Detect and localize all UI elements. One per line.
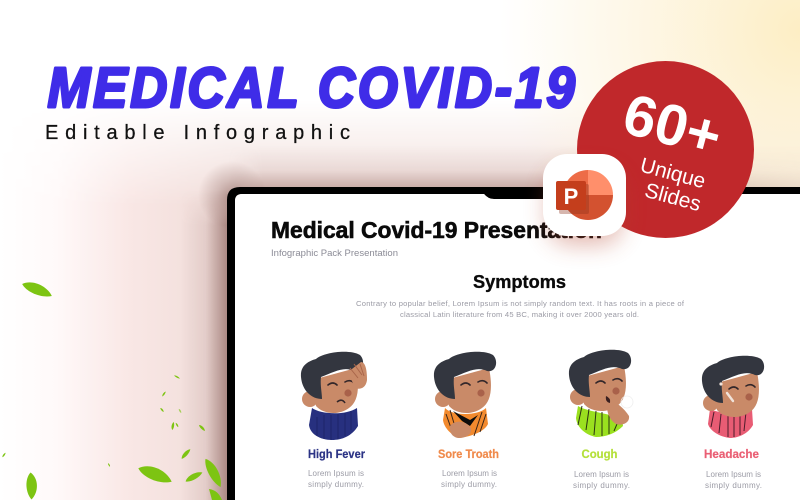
illustration: high fever <box>301 352 367 440</box>
leaf <box>136 462 174 487</box>
caption: cough: Lorem Ipsum is <box>574 470 629 479</box>
illustration: headache <box>702 356 764 438</box>
badge number: 60+ <box>616 81 728 170</box>
leaf <box>202 456 225 489</box>
caption: sore throat <box>441 469 497 489</box>
section description <box>356 299 685 319</box>
caption: high fever: Lorem Ipsum is <box>308 469 364 478</box>
icon letter: P <box>564 184 578 209</box>
leaf <box>174 375 180 379</box>
badge caption: Slides <box>642 179 703 216</box>
laptop frame <box>227 187 800 500</box>
leaf <box>209 489 222 500</box>
caption: cough: simply dummy. <box>573 481 630 490</box>
symptom: cough <box>569 350 633 490</box>
symptom: high fever <box>301 352 367 489</box>
leaf <box>2 452 6 458</box>
leaf <box>180 448 192 460</box>
leaf <box>171 422 175 430</box>
leaf <box>184 470 204 484</box>
caption: cough <box>573 470 630 490</box>
symptom: headache <box>702 356 764 490</box>
slide title: Medical Covid-19 Presentation <box>271 217 602 243</box>
badge: 60+ unique slides <box>577 61 754 238</box>
leaf <box>108 463 111 467</box>
powerpoint icon <box>543 154 626 244</box>
caption: headache: simply dummy. <box>705 481 762 490</box>
slide subtitle: Infographic Pack Presentation <box>271 248 398 259</box>
label: cough: Cough <box>582 449 618 461</box>
label: high fever: High Fever <box>308 449 365 461</box>
leaf <box>175 422 179 427</box>
caption: headache: Lorem Ipsum is <box>706 470 761 479</box>
badge caption <box>638 154 708 216</box>
title: MEDICAL COVID-19 <box>48 57 575 120</box>
caption: headache <box>705 470 762 490</box>
section heading: Symptoms <box>473 272 566 292</box>
label: sore throat: Sore Troath <box>438 449 499 461</box>
leaf <box>162 391 166 397</box>
label: headache: Headache <box>704 449 759 461</box>
symptom: sore throat <box>434 352 499 489</box>
leaf <box>160 407 164 412</box>
caption: high fever <box>308 469 364 489</box>
leaf <box>178 408 182 413</box>
leaf <box>20 278 54 300</box>
section description: Contrary to popular belief, Lorem Ipsum is not simply random text. It has roots in a piece of <box>356 299 685 308</box>
decorative leaves <box>2 278 225 500</box>
caption: sore throat: simply dummy. <box>441 480 497 489</box>
subtitle: Editable Infographic <box>45 122 350 144</box>
illustration: cough <box>569 350 633 437</box>
illustration: sore throat <box>434 352 496 438</box>
caption: high fever: simply dummy. <box>308 480 364 489</box>
leaf <box>26 472 37 500</box>
laptop screen <box>235 194 800 500</box>
section description: classical Latin literature from 45 BC, making it over 2000 years old. <box>400 310 639 319</box>
leaf <box>198 424 206 432</box>
caption: sore throat: Lorem Ipsum is <box>442 469 497 478</box>
badge caption: Unique <box>638 154 708 193</box>
